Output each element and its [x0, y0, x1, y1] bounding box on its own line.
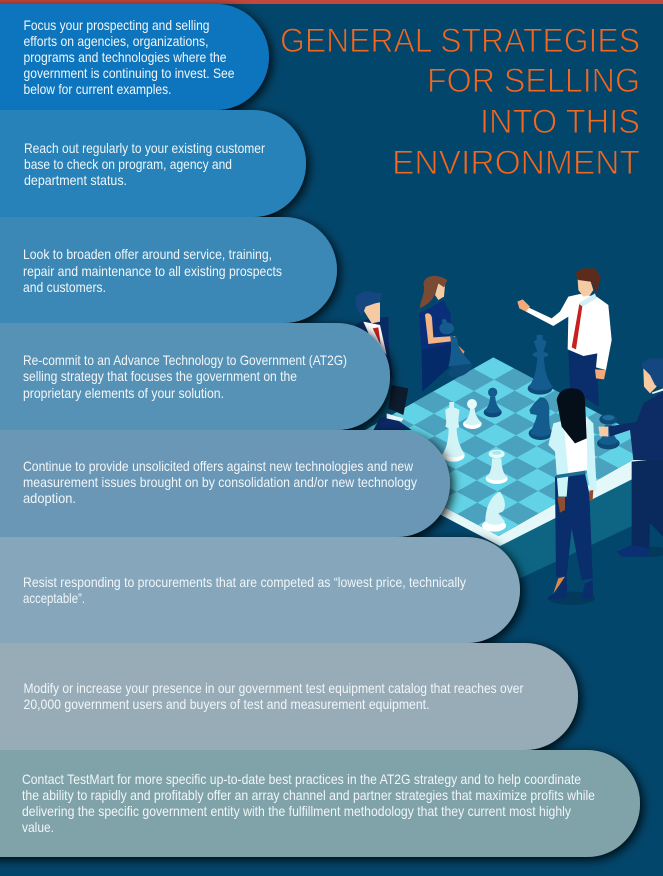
panel 7: catalog presence [0, 643, 578, 750]
panel 1: focus prospecting [0, 4, 269, 110]
panel 8: contact TestMart: the ability to rapidly and profitably offer an array channel and partner strategies that maximize profits while [22, 787, 595, 803]
person: man at right in navy suit [598, 358, 663, 557]
panel 1: focus prospecting: below for current examples. [24, 81, 172, 97]
panel 3: broaden offer [0, 217, 337, 323]
panel 7: catalog presence: Modify or increase your presence in our government test equipment catalog that reaches over [24, 680, 524, 696]
panel 3: broaden offer: repair and maintenance to all existing prospects [23, 263, 282, 279]
panel 1: focus prospecting: government is continuing to invest. See [24, 65, 235, 81]
panel 3: broaden offer: Look to broaden offer around service, training, [23, 246, 272, 262]
person: woman holding chess queen [419, 276, 465, 392]
person: woman with black hair [547, 388, 597, 605]
person: man in white shirt [517, 268, 612, 407]
title: ENVIRONMENT [392, 144, 640, 182]
panel 1: focus prospecting: programs and technologies where the [24, 49, 227, 65]
person: seated man with dark hair [373, 385, 412, 430]
chess board [333, 357, 663, 578]
chess piece: dark pawn [484, 388, 502, 417]
panel 5: unsolicited offers: Continue to provide unsolicited offers against new technologies and new [23, 458, 414, 474]
chess piece: dark rook [597, 414, 620, 449]
illustration: business people around a chess board [333, 268, 663, 605]
top red bar [0, 0, 663, 4]
chess piece: dark knight [529, 397, 553, 440]
panel 6: procurements [0, 537, 520, 643]
panel 3: broaden offer: and customers. [23, 279, 106, 295]
chess piece: white rook [486, 450, 508, 484]
title: GENERAL STRATEGIES [280, 22, 640, 60]
panel 2: existing customers: Reach out regularly to your existing customer [24, 140, 265, 156]
chess piece: dark king [528, 335, 553, 395]
panel 5: unsolicited offers: adoption. [23, 490, 76, 506]
panel 1: focus prospecting: efforts on agencies, organizations, [24, 33, 208, 49]
panel 2: existing customers: base to check on program, agency and [24, 156, 232, 172]
chess piece: white pawn [463, 399, 482, 429]
panel 5: unsolicited offers [0, 430, 450, 537]
chess piece: white knight [482, 492, 506, 532]
panel 4: AT2G strategy: Re-commit to an Advance Technology to Government (AT2G) [23, 352, 347, 368]
person: man in navy suit at left [355, 291, 393, 380]
panel 6: procurements: Resist responding to procurements that are competed as “lowest price, technically [23, 574, 466, 590]
panel 6: procurements: acceptable”. [23, 590, 85, 606]
panel 4: AT2G strategy [0, 323, 390, 430]
panel 2: existing customers: department status. [24, 172, 127, 188]
chess piece: white king [442, 402, 465, 462]
panel 1: focus prospecting: Focus your prospecting and selling [24, 17, 210, 33]
title: INTO THIS [480, 103, 640, 141]
chess piece: dark queen held by woman [439, 319, 474, 381]
panel 8: contact TestMart: value. [22, 819, 54, 835]
title: FOR SELLING [427, 62, 640, 100]
panel 5: unsolicited offers: measurement issues brought on by consolidation and/or new technology [23, 474, 417, 490]
title [280, 22, 640, 182]
panel 4: AT2G strategy: selling strategy that focuses the government on the [23, 368, 297, 384]
panel 8: contact TestMart: Contact TestMart for more specific up-to-date best practices in the AT2G strategy and to help coordinate [22, 771, 581, 787]
panel 4: AT2G strategy: proprietary elements of your solution. [23, 385, 224, 401]
panel 8: contact TestMart: delivering the specific government entity with the fulfillment methodology that they current most highly [22, 803, 571, 819]
panel 2: existing customers [0, 110, 306, 217]
panel 8: contact TestMart [0, 750, 640, 857]
panel 7: catalog presence: 20,000 government users and buyers of test and measurement equipment. [24, 696, 430, 712]
